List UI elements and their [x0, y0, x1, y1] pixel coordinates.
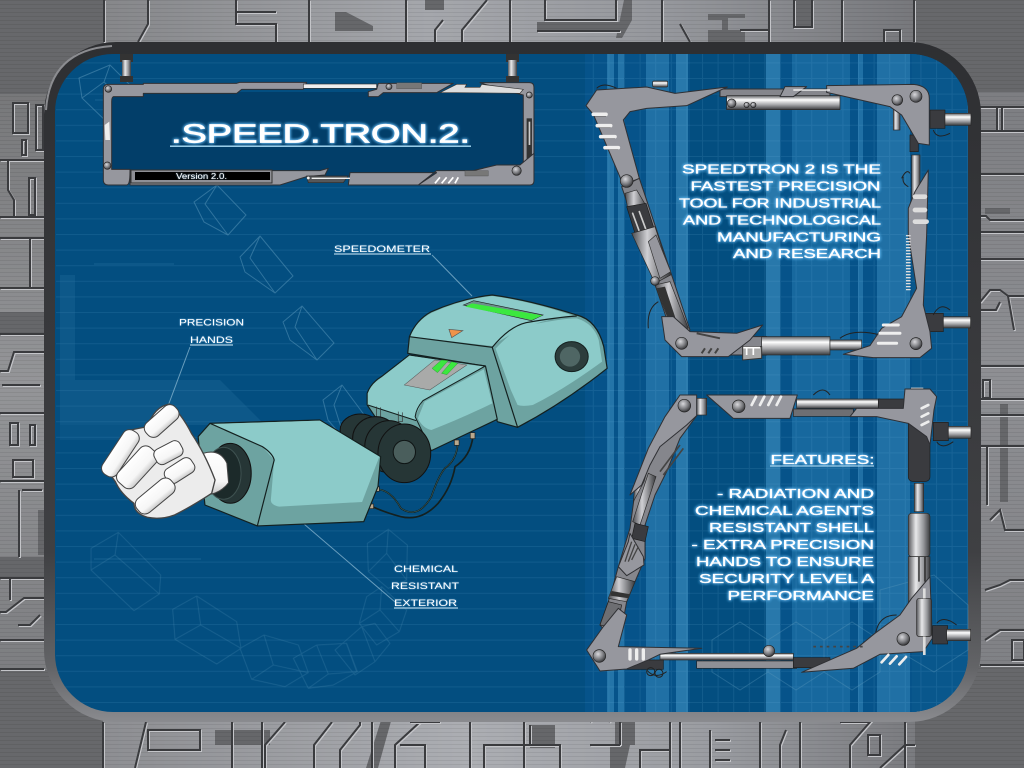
wall pipes [597, 85, 971, 338]
panel grid lines [56, 54, 968, 712]
orange indicator [449, 329, 463, 338]
wireframe boxes [79, 65, 407, 688]
top and bottom pipes [653, 81, 920, 355]
frame: description [586, 81, 971, 360]
right rail and bottom-right bracket [843, 170, 932, 358]
description text: TOOL FOR INDUSTRIAL [679, 196, 881, 210]
description text: MANUFACTURING [717, 230, 881, 244]
version label: Version 2.0. [176, 171, 227, 181]
right rail pipes [908, 423, 930, 605]
features text: RESISTANT SHELL [709, 521, 874, 535]
bottom-left bracket [662, 317, 763, 357]
features text: CHEMICAL AGENTS [695, 504, 874, 518]
description text [679, 162, 881, 261]
bracket details [625, 397, 932, 664]
title frame [103, 54, 534, 185]
title text: .SPEED.TRON.2. [171, 118, 470, 148]
label: speedometer: SPEEDOMETER [334, 244, 430, 255]
label: chemical resistant exterior: EXTERIOR [394, 598, 457, 609]
top pipes [697, 388, 923, 416]
frame bolts [593, 399, 910, 662]
label: chemical resistant exterior: CHEMICAL [394, 564, 458, 575]
connector plugs [369, 433, 475, 509]
forearm block [198, 420, 381, 526]
label: precision hands [179, 318, 244, 346]
device illustration [99, 295, 607, 526]
cable wires [372, 437, 473, 518]
description text: AND TECHNOLOGICAL [683, 214, 881, 228]
label: precision hands: PRECISION [179, 318, 244, 328]
control unit [367, 355, 497, 451]
label: chemical resistant exterior: RESISTANT [391, 581, 459, 592]
bottom pipes [623, 653, 830, 677]
leader lines [168, 255, 472, 602]
features text: HANDS TO ENSURE [696, 555, 874, 569]
features text: SECURITY LEVEL A [699, 572, 875, 586]
features text [692, 453, 875, 603]
title dark screen [110, 92, 528, 176]
description text: FASTEST PRECISION [690, 180, 880, 194]
hexagon pattern [712, 575, 968, 690]
features text: PERFORMANCE [728, 589, 874, 603]
label: chemical resistant exterior [391, 564, 459, 609]
bottom-left bracket [587, 608, 702, 671]
description text: SPEEDTRON 2 IS THE [682, 162, 881, 176]
left arm [600, 415, 697, 647]
top-left bracket [586, 87, 727, 185]
frame bolts [620, 90, 922, 350]
fist [99, 402, 229, 518]
top-right bracket [850, 389, 937, 445]
title frame metal [103, 82, 534, 185]
features text: - EXTRA PRECISION [692, 538, 874, 552]
lens [555, 342, 588, 372]
left arm [622, 178, 690, 333]
wrist ring [206, 443, 251, 503]
version bar [131, 170, 272, 183]
top bar piece [707, 395, 797, 418]
bottom-right bracket [802, 577, 932, 672]
left lower plate [618, 533, 644, 576]
top-left arm [630, 395, 697, 495]
bracket details [593, 90, 927, 360]
right blue stripes [585, 54, 968, 712]
features text: FEATURES: [770, 453, 874, 467]
wall pipes [647, 390, 971, 675]
background chevrons [60, 99, 265, 560]
top-right bracket [827, 84, 929, 145]
frame: features [587, 388, 971, 677]
title hangers [120, 54, 519, 82]
green display [463, 301, 543, 321]
black rollers [340, 414, 431, 483]
description text: AND RESEARCH [733, 247, 881, 261]
features text: - RADIATION AND [717, 487, 874, 501]
speedometer unit [408, 295, 607, 427]
label: precision hands: HANDS [190, 335, 233, 346]
